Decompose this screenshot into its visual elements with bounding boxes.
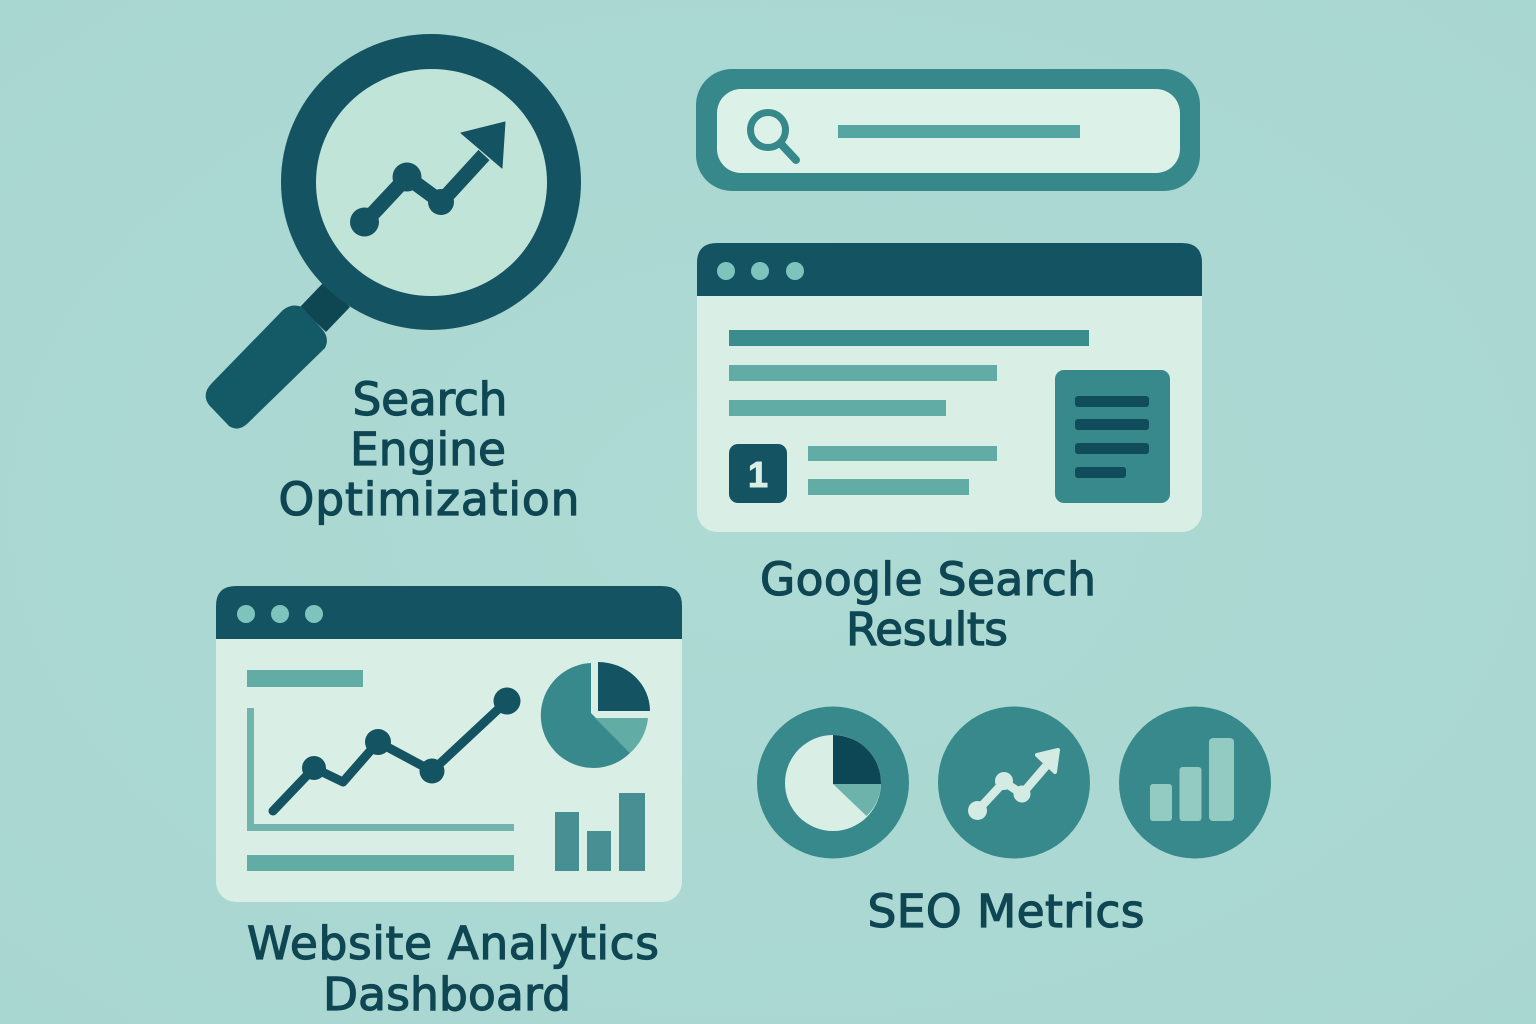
heading: Website Analytics Dashboard: Website Analytics	[247, 917, 659, 970]
heading: Website Analytics Dashboard	[247, 917, 659, 1021]
icon: small magnifier	[750, 112, 796, 160]
heading: Search Engine Optimization: Search	[352, 373, 508, 426]
pie chart	[541, 662, 650, 768]
heading: Search Engine Optimization: Optimization	[278, 473, 580, 526]
metric: bars circle	[1119, 706, 1271, 858]
heading: Website Analytics Dashboard: Dashboard	[323, 968, 571, 1021]
panel: Google search results window	[697, 243, 1202, 532]
search bar	[696, 69, 1200, 191]
heading: Search Engine Optimization	[278, 373, 580, 526]
heading: Google Search Results: Results	[846, 603, 1008, 656]
document card	[1055, 370, 1170, 503]
icon: magnifying glass with growth arrow	[206, 34, 581, 429]
heading: Google Search Results: Google Search	[760, 553, 1096, 606]
metric: pie ring	[757, 706, 909, 858]
rank badge	[729, 444, 787, 503]
panel: analytics dashboard window	[216, 586, 682, 902]
bar chart	[555, 793, 645, 871]
heading: SEO Metrics: SEO Metrics	[868, 885, 1144, 938]
heading: Search Engine Optimization: Engine	[350, 423, 506, 476]
metric: trend circle	[938, 706, 1090, 858]
line chart	[273, 688, 520, 811]
heading: Google Search Results	[760, 553, 1096, 656]
rank badge: 1	[748, 454, 768, 495]
